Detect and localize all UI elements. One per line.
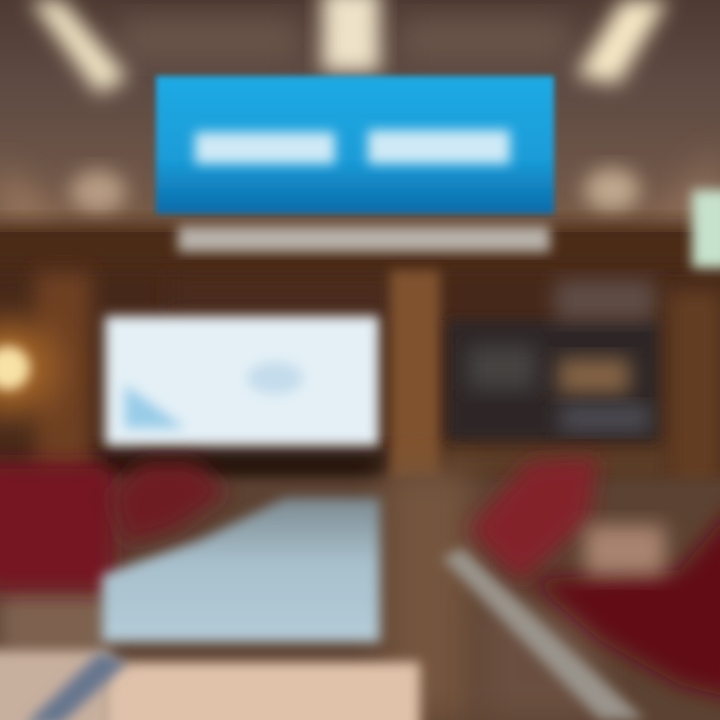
screen chart accent [125,385,185,428]
white display screen [105,316,379,446]
wall lamp [0,320,58,416]
right red seating [468,458,720,700]
wooden beam [0,224,720,270]
left red seating [0,462,228,592]
diagonal light rail [442,548,645,720]
ceiling [0,0,720,235]
blue sign [156,76,554,214]
right green light [692,190,720,268]
central wood column [390,270,440,485]
lower floor area [0,470,720,720]
left wood pillar [35,272,91,472]
ceiling lights [30,0,668,214]
right wood panel [668,290,720,490]
back wall [0,232,720,488]
caption strip under sign [178,226,550,252]
glass reflection panel [102,498,380,642]
sign lettering [195,130,510,164]
cream floor [0,650,420,720]
dark display board [448,280,660,440]
